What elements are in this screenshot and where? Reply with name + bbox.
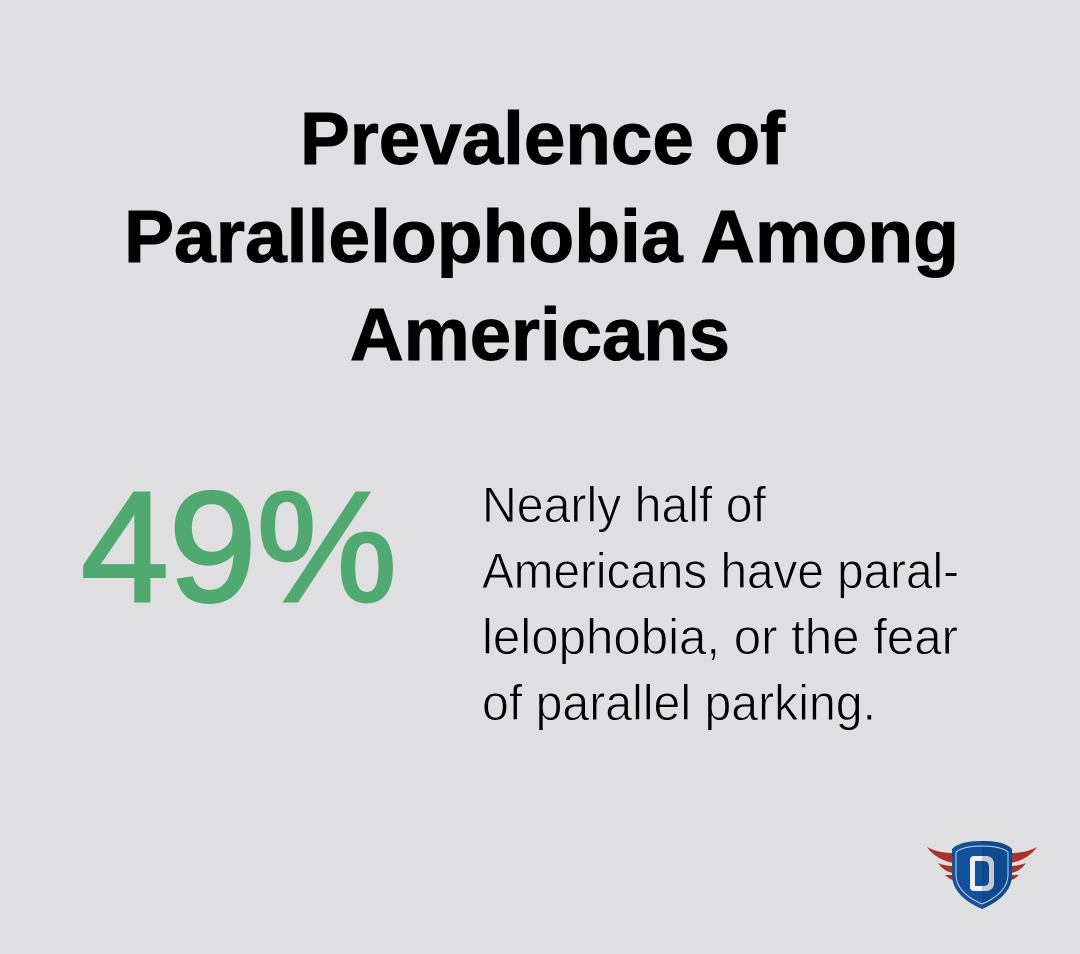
letter D	[970, 856, 994, 891]
description text: Americans have paral-	[482, 543, 959, 599]
description text: lelophobia, or the fear	[482, 609, 958, 665]
title: Parallelophobia Among	[124, 195, 959, 278]
title	[124, 97, 959, 376]
shield inner outline	[956, 846, 1008, 904]
right wings	[1010, 847, 1037, 880]
left wings	[927, 847, 954, 880]
title: Americans	[350, 293, 730, 376]
description text	[482, 477, 959, 731]
letter D right shade	[982, 856, 994, 891]
description text: Nearly half of	[482, 477, 766, 533]
statistic: 49%: 49%	[81, 460, 397, 635]
title: Prevalence of	[300, 97, 785, 180]
description text: of parallel parking.	[482, 675, 876, 731]
icon: winged shield logo	[927, 841, 1037, 909]
shield	[952, 841, 1012, 909]
shield right shade	[982, 841, 1012, 909]
